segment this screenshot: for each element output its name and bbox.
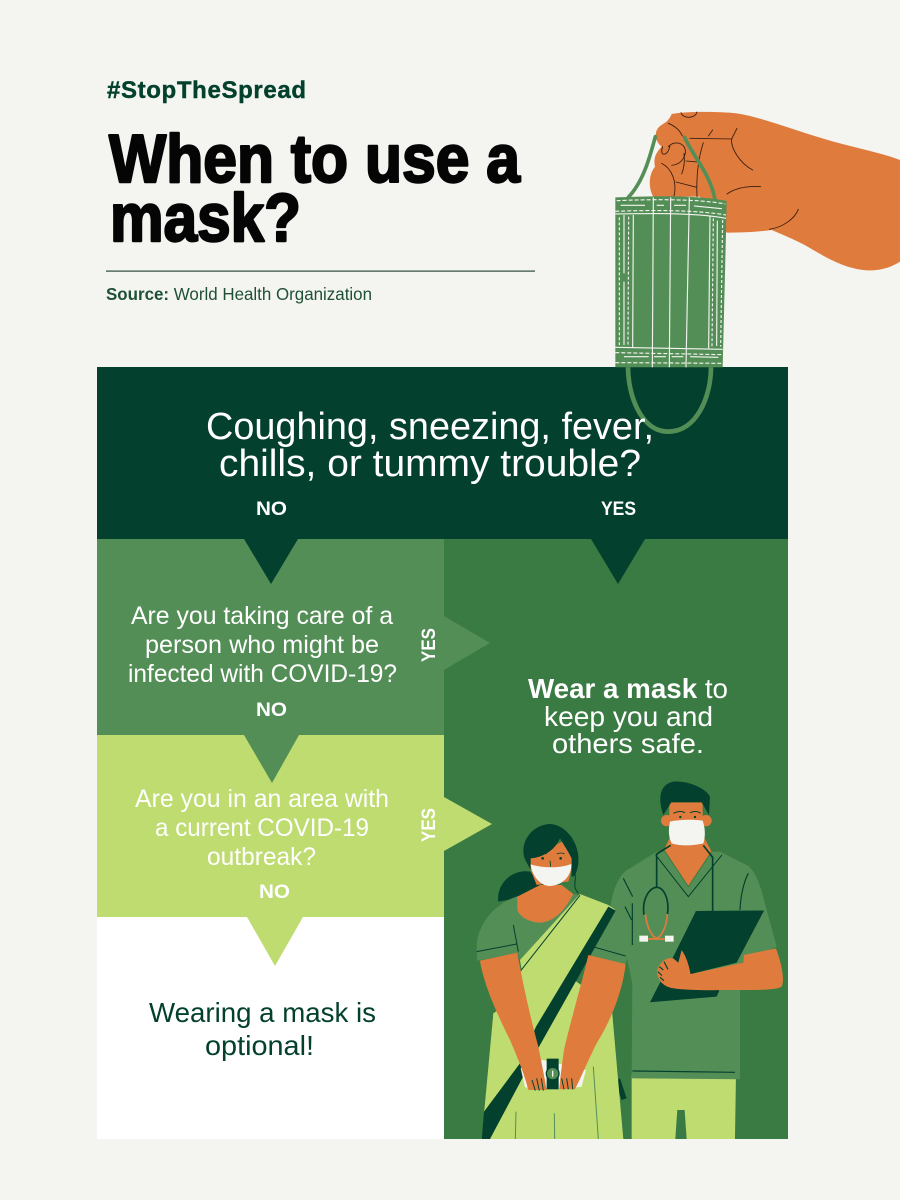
panel: wear a mask — [444, 539, 788, 1139]
eyes and brows — [679, 816, 696, 818]
outbreak question text: a current COVID-19 — [155, 814, 369, 842]
header question text — [206, 406, 654, 485]
trousers — [632, 1075, 736, 1139]
label: yes: YES — [601, 499, 636, 520]
source line: Source: World Health Organization — [106, 284, 372, 304]
title: mask? — [110, 180, 301, 256]
illustration: health workers — [477, 781, 783, 1139]
label: outbreak no: NO — [259, 882, 290, 903]
caregiver question text: person who might be — [145, 631, 379, 659]
sari drape — [484, 894, 615, 1112]
man — [610, 781, 783, 1139]
header question text: Coughing, sneezing, fever, — [206, 406, 654, 448]
hand — [650, 112, 900, 270]
wear a mask text: Wear a mask to — [528, 673, 728, 704]
mask — [531, 864, 571, 886]
hashtag: #StopTheSpread — [107, 77, 306, 104]
arrow: caregiver no — [244, 735, 299, 783]
blouse — [477, 894, 628, 970]
skirt pleats — [515, 1067, 598, 1139]
label: outbreak yes: YES — [419, 808, 440, 842]
panel: optional — [97, 917, 444, 1139]
face — [528, 838, 572, 885]
illustration: hand holding mask — [615, 112, 900, 432]
mask body — [615, 196, 727, 367]
skirt — [482, 970, 623, 1139]
optional text: optional! — [205, 1030, 314, 1061]
wear a mask text — [528, 673, 728, 759]
woman — [477, 824, 628, 1139]
hair — [523, 824, 578, 877]
panel: caregiver question — [97, 539, 444, 735]
hair — [660, 781, 710, 815]
clipboard — [650, 911, 764, 1002]
title — [109, 121, 521, 256]
arms — [480, 953, 547, 1090]
scrub creases — [623, 873, 748, 1072]
label: caregiver no: NO — [256, 700, 287, 721]
outbreak question text: outbreak? — [207, 843, 316, 871]
mask straps top — [628, 137, 715, 199]
sari dark band — [482, 907, 616, 1139]
label: no: NO — [256, 499, 287, 520]
arm — [657, 948, 783, 990]
hair strand — [575, 873, 578, 893]
back hair bun — [498, 871, 543, 902]
sleeve lines — [477, 925, 626, 956]
arrow: outbreak no — [247, 917, 303, 966]
outbreak question text: Are you in an area with — [135, 785, 389, 813]
caregiver question text — [128, 602, 397, 688]
arrow: yes down — [591, 539, 645, 584]
arrow: outbreak yes — [444, 797, 492, 851]
wear a mask text: others safe. — [552, 728, 704, 759]
hand crease lines — [662, 112, 798, 229]
mask stitching — [615, 197, 726, 367]
arrow: caregiver yes — [444, 616, 490, 670]
caregiver question text: Are you taking care of a — [131, 602, 393, 630]
head — [661, 815, 672, 826]
eyes — [541, 857, 562, 860]
optional text: Wearing a mask is — [149, 997, 376, 1028]
neck — [664, 830, 712, 887]
wear a mask text: keep you and — [544, 701, 713, 732]
panel: outbreak question — [97, 735, 444, 917]
caregiver question text: infected with COVID-19? — [128, 660, 397, 688]
panel: header question — [97, 367, 788, 539]
title: When to use a — [109, 121, 521, 197]
mask — [669, 820, 705, 845]
arrow: no down — [244, 539, 298, 584]
scrub top — [610, 852, 777, 1079]
label: caregiver yes: YES — [419, 628, 440, 662]
chest skin — [517, 885, 573, 923]
bag strap behind — [615, 1078, 627, 1100]
phone/passbook — [521, 1060, 586, 1089]
mask strap bottom — [628, 367, 711, 432]
optional text — [149, 997, 376, 1061]
header question text: chills, or tummy trouble? — [219, 443, 641, 485]
stethoscope — [644, 845, 713, 939]
outbreak question text — [135, 785, 389, 871]
